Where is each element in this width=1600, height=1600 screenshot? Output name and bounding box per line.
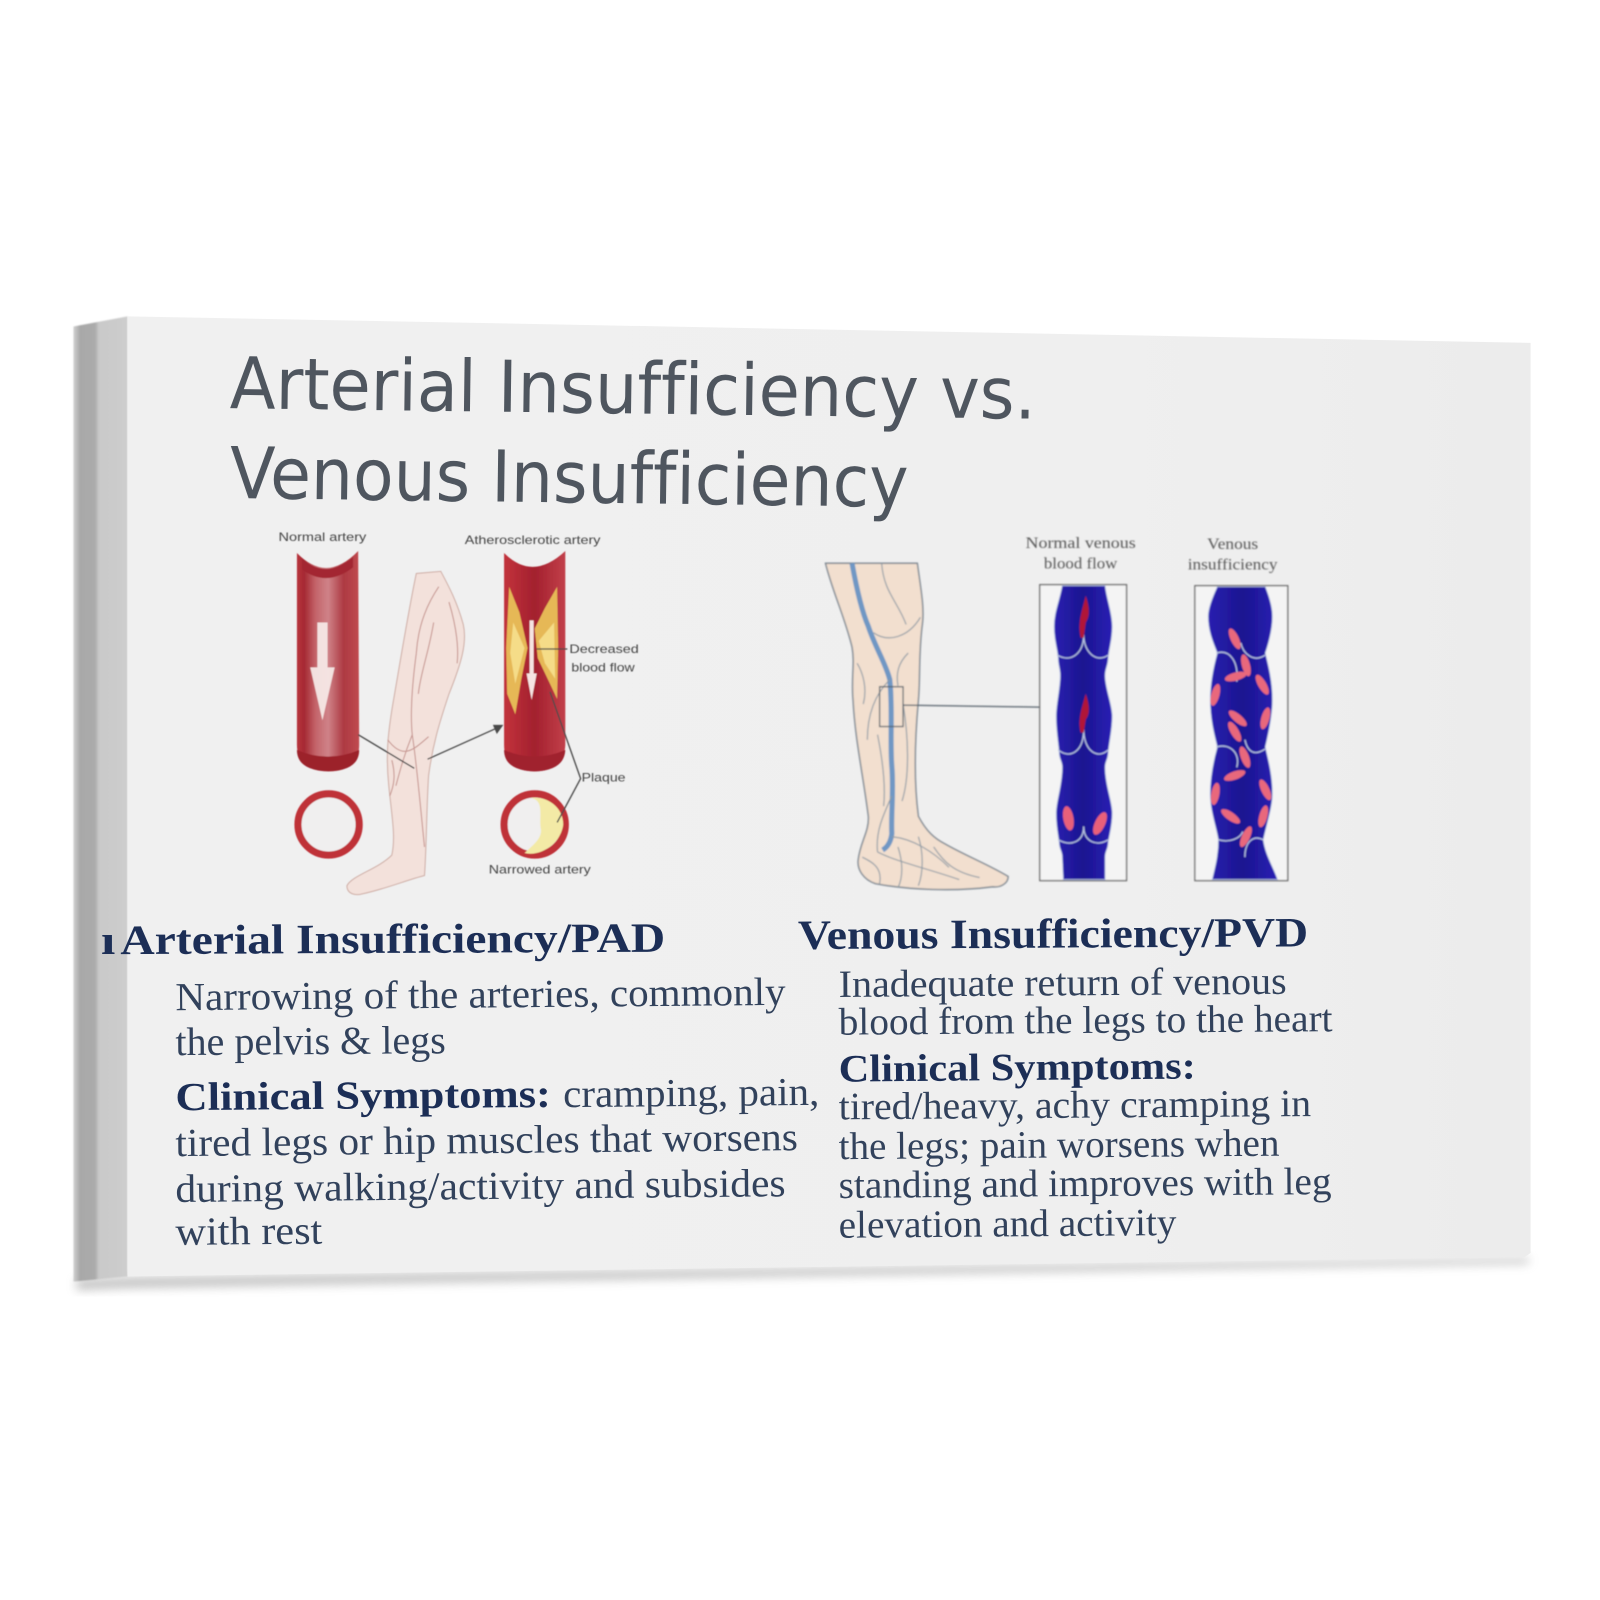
clinical symptoms: venous: the legs; pain worsens when: [839, 1122, 1280, 1168]
label: plaque: Plaque: [582, 771, 626, 785]
leader arrows: [358, 649, 581, 822]
clinical symptoms: arterial: tired legs or hip muscles that worsens: [175, 1115, 798, 1165]
clinical symptoms: venous: tired/heavy, achy cramping in: [839, 1082, 1311, 1128]
heading: venous: Venous Insufficiency/PVD: [798, 910, 1308, 959]
atherosclerotic artery ring with plaque: [504, 794, 565, 855]
clinical symptoms: venous: standing and improves with leg: [839, 1160, 1332, 1207]
canvas side edge: [73, 316, 128, 1282]
title: [229, 342, 1037, 524]
valves: [1216, 643, 1265, 857]
label: decreased blood flow: [569, 642, 639, 674]
clinical symptoms: venous: [838, 1045, 1332, 1247]
canvas front face: [128, 316, 1531, 1277]
clinical symptoms: arterial: Clinical Symptoms:: [175, 1072, 551, 1119]
label: atherosclerotic artery: Atherosclerotic artery: [465, 533, 602, 547]
clinical symptoms: venous: Clinical Symptoms:: [838, 1045, 1196, 1091]
label: normal venous blood flow: [1026, 535, 1136, 572]
label: narrowed artery: Narrowed artery: [489, 862, 592, 876]
clinical symptoms: venous: elevation and activity: [839, 1201, 1177, 1247]
label: decreased blood flow: Decreased: [569, 642, 639, 656]
illustration: venous insufficiency: [826, 535, 1288, 890]
label: normal artery: Normal artery: [279, 530, 367, 544]
definition: venous: blood from the legs to the heart: [839, 997, 1333, 1044]
definition: venous: Inadequate return of venous: [839, 960, 1287, 1006]
clinical symptoms: arterial: cramping, pain,: [563, 1070, 819, 1116]
leg illustration: [347, 571, 465, 895]
heading: arterial: ı: [101, 918, 115, 963]
label: venous insufficiency: [1188, 536, 1278, 573]
plaque deposits: [506, 587, 558, 714]
definition: arterial: Narrowing of the arteries, commonly: [175, 970, 786, 1019]
title: Venous Insufficiency: [229, 432, 909, 524]
label: venous insufficiency: Venous: [1207, 536, 1258, 553]
blood cells: [1061, 596, 1110, 837]
label: normal venous blood flow: blood flow: [1044, 555, 1117, 572]
blood cells: [1208, 627, 1274, 849]
panel: arterial insufficiency text: [101, 916, 819, 1254]
valves: [1057, 635, 1108, 843]
canvas drop shadow: [77, 1258, 1529, 1290]
clinical symptoms: arterial: [175, 1070, 819, 1254]
atherosclerotic artery tube: [504, 551, 565, 771]
clinical symptoms: arterial: with rest: [175, 1209, 323, 1254]
illustration: arterial insufficiency: [279, 530, 639, 895]
clinical symptoms: arterial: during walking/activity and subsides: [175, 1161, 786, 1211]
label: venous insufficiency: insufficiency: [1188, 556, 1278, 573]
label: decreased blood flow: blood flow: [571, 660, 635, 674]
detail box and connector: [880, 687, 1040, 727]
panel: venous insufficiency text: [798, 910, 1333, 1247]
label: normal venous blood flow: Normal venous: [1026, 535, 1136, 552]
definition: arterial: [175, 970, 786, 1064]
heading: arterial: Arterial Insufficiency/PAD: [120, 916, 665, 964]
venous insufficiency panel: [1195, 586, 1288, 881]
normal vein panel: [1040, 585, 1127, 881]
normal artery tube: [297, 551, 359, 771]
leg with veins: [826, 563, 1008, 890]
definition: arterial: the pelvis & legs: [175, 1018, 446, 1064]
definition: venous: [839, 960, 1333, 1044]
normal artery ring: [298, 794, 359, 855]
title: Arterial Insufficiency vs.: [229, 342, 1037, 436]
